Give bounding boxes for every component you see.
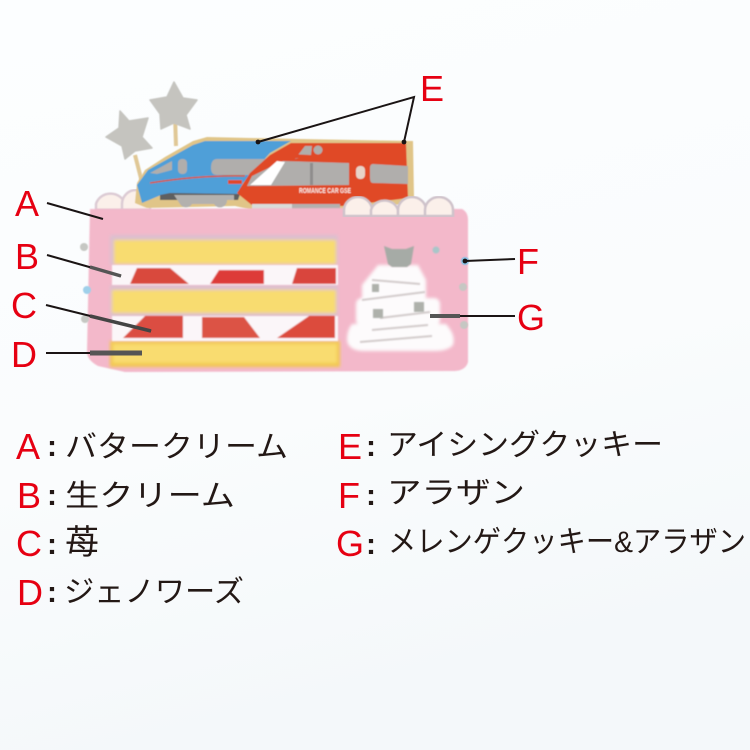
leader line: D: D xyxy=(11,334,37,375)
blue train xyxy=(137,141,291,207)
legend: C: C xyxy=(16,523,42,564)
legend: C: : xyxy=(47,528,57,561)
front cream puffs xyxy=(344,197,453,216)
legend: C xyxy=(16,523,99,564)
legend: F xyxy=(338,475,525,516)
illustration: train cookies xyxy=(135,137,414,210)
leader lines: E xyxy=(256,68,444,144)
legend: D: : xyxy=(47,576,57,609)
legend: A: : xyxy=(47,430,57,463)
legend: D xyxy=(17,572,244,613)
leader line: B: B xyxy=(15,236,39,277)
leader line: G xyxy=(430,297,545,338)
legend: B: B xyxy=(17,475,41,516)
leader line: G: G xyxy=(517,297,545,338)
legend: B xyxy=(17,475,235,516)
legend: F: F xyxy=(338,475,360,516)
leader line: D xyxy=(11,334,142,375)
legend: D: ジェノワーズ xyxy=(64,576,244,609)
leader line: F: F xyxy=(517,241,539,282)
legend: G xyxy=(336,523,746,564)
leader lines: E: E xyxy=(420,68,444,109)
red train: ROMANCE CAR GSE xyxy=(299,188,351,195)
leader line: B xyxy=(15,236,121,277)
legend: E: アイシングクッキー xyxy=(387,429,663,462)
legend: E: E xyxy=(338,426,362,467)
illustration: cake body xyxy=(87,197,468,372)
legend: G: G xyxy=(336,523,364,564)
cream and strawberries xyxy=(112,265,338,341)
illustration: dragees around the cake xyxy=(80,243,469,329)
legend: D: D xyxy=(17,572,43,613)
legend: C: 苺 xyxy=(65,524,99,562)
illustration: meringue tree xyxy=(347,246,454,351)
leader line: A xyxy=(15,183,103,224)
legend: F: アラザン xyxy=(387,477,525,510)
legend: E: : xyxy=(366,430,376,463)
legend: B: 生クリーム xyxy=(65,480,235,513)
silver dragees xyxy=(372,246,440,318)
legend: G: : xyxy=(366,528,376,561)
legend: B: : xyxy=(47,479,57,512)
legend: A: バタークリーム xyxy=(65,431,288,464)
leader line: F xyxy=(463,241,539,282)
genoise layers xyxy=(110,235,340,367)
illustration: cake topper stars xyxy=(106,82,197,190)
red train xyxy=(237,143,408,210)
legend: A: A xyxy=(16,426,40,467)
legend: E xyxy=(338,426,663,467)
leader line: C: C xyxy=(11,285,37,326)
legend: F: : xyxy=(366,479,376,512)
leader line: A: A xyxy=(15,183,39,224)
leader line: C xyxy=(11,285,151,331)
illustration: back cream puffs xyxy=(96,190,150,210)
legend: A xyxy=(16,426,288,467)
